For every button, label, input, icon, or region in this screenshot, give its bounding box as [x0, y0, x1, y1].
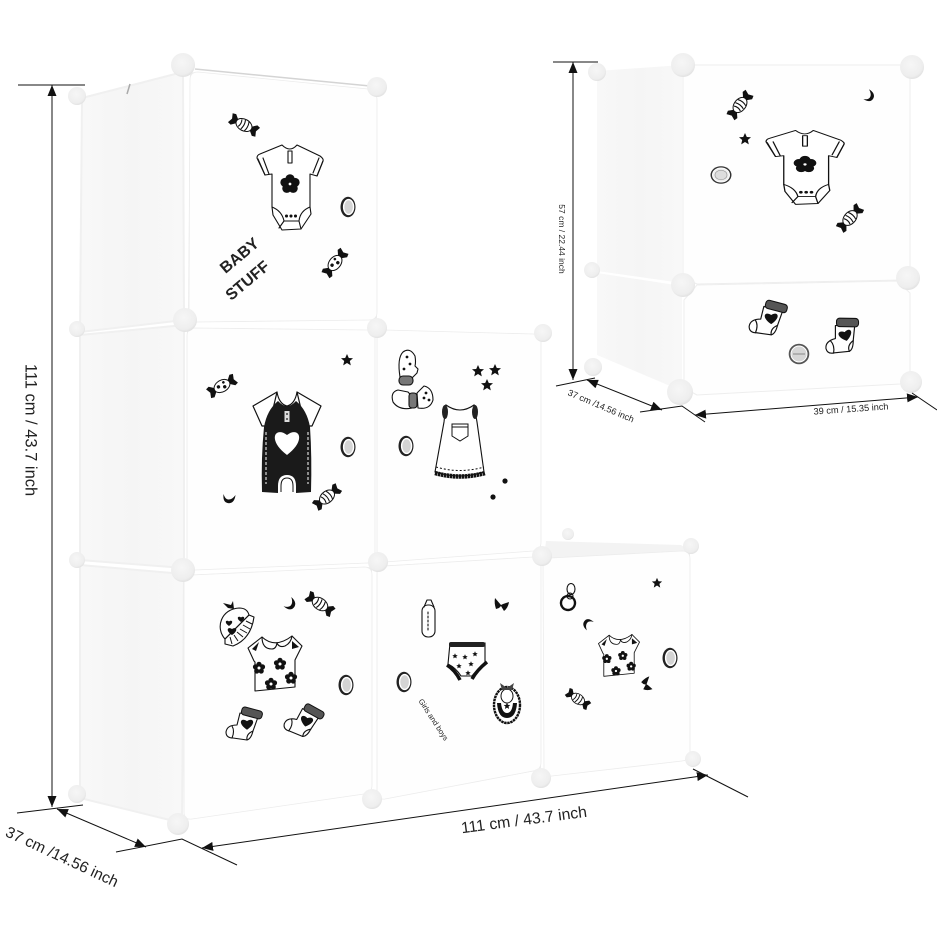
door middle-right: dress and mittens: [392, 350, 508, 500]
dimension: small depth: [566, 380, 705, 424]
door middle-left: romper: [206, 354, 356, 512]
top rim lines: [195, 69, 370, 86]
small unit: two-cube organiser: [584, 53, 924, 405]
lettering: STUFF: STUFF: [223, 258, 273, 304]
icon: stars: [472, 364, 501, 390]
icon: training pants: [447, 642, 487, 680]
label: 37 cm /14.56 inch: [566, 388, 636, 424]
door bottom-right: rattle, shirt: [561, 578, 678, 711]
lettering: girls and boys: Girls and boys: [417, 697, 450, 742]
door bottom-middle: bottle, pants, bib: [396, 598, 520, 742]
connector balls: [68, 53, 701, 835]
icon: romper: [253, 392, 321, 493]
dimension: main depth: [3, 809, 237, 891]
icon: bib: [494, 683, 520, 723]
door top: onesie and candies: [710, 89, 876, 234]
main unit: six-cube organiser: [68, 53, 701, 835]
dimension: main width: [202, 769, 748, 848]
door top-left: baby stuff: [217, 112, 356, 304]
front panels: [683, 65, 910, 395]
icon: mittens: [392, 350, 433, 409]
dimension: main height: [17, 85, 85, 813]
front panels: [184, 72, 690, 819]
label: 111 cm / 43.7 inch: [460, 804, 588, 837]
door bottom-left: hat, shirt, socks: [220, 590, 354, 740]
icon: button: [710, 166, 732, 184]
side panels: [597, 65, 682, 391]
dimension: small height: [553, 62, 598, 386]
connector balls: [584, 53, 924, 405]
corner backing: [184, 72, 690, 820]
dimension: small width: [695, 393, 937, 417]
lettering: BABY: BABY: [217, 235, 263, 277]
icon: hat: [220, 601, 254, 646]
side panels: [80, 72, 184, 823]
door bottom: socks: [749, 300, 866, 364]
icon: bottle: [422, 600, 435, 637]
label: 111 cm / 43.7 inch: [22, 364, 40, 496]
top surface of front-right cube: [544, 541, 692, 558]
icon: dress: [435, 405, 485, 476]
icon: button: [789, 344, 809, 364]
icon: rattle: [561, 584, 575, 610]
label: 39 cm / 15.35 inch: [813, 401, 889, 417]
label: 57 cm / 22.44 inch: [557, 204, 567, 274]
label: 37 cm /14.56 inch: [3, 824, 121, 891]
